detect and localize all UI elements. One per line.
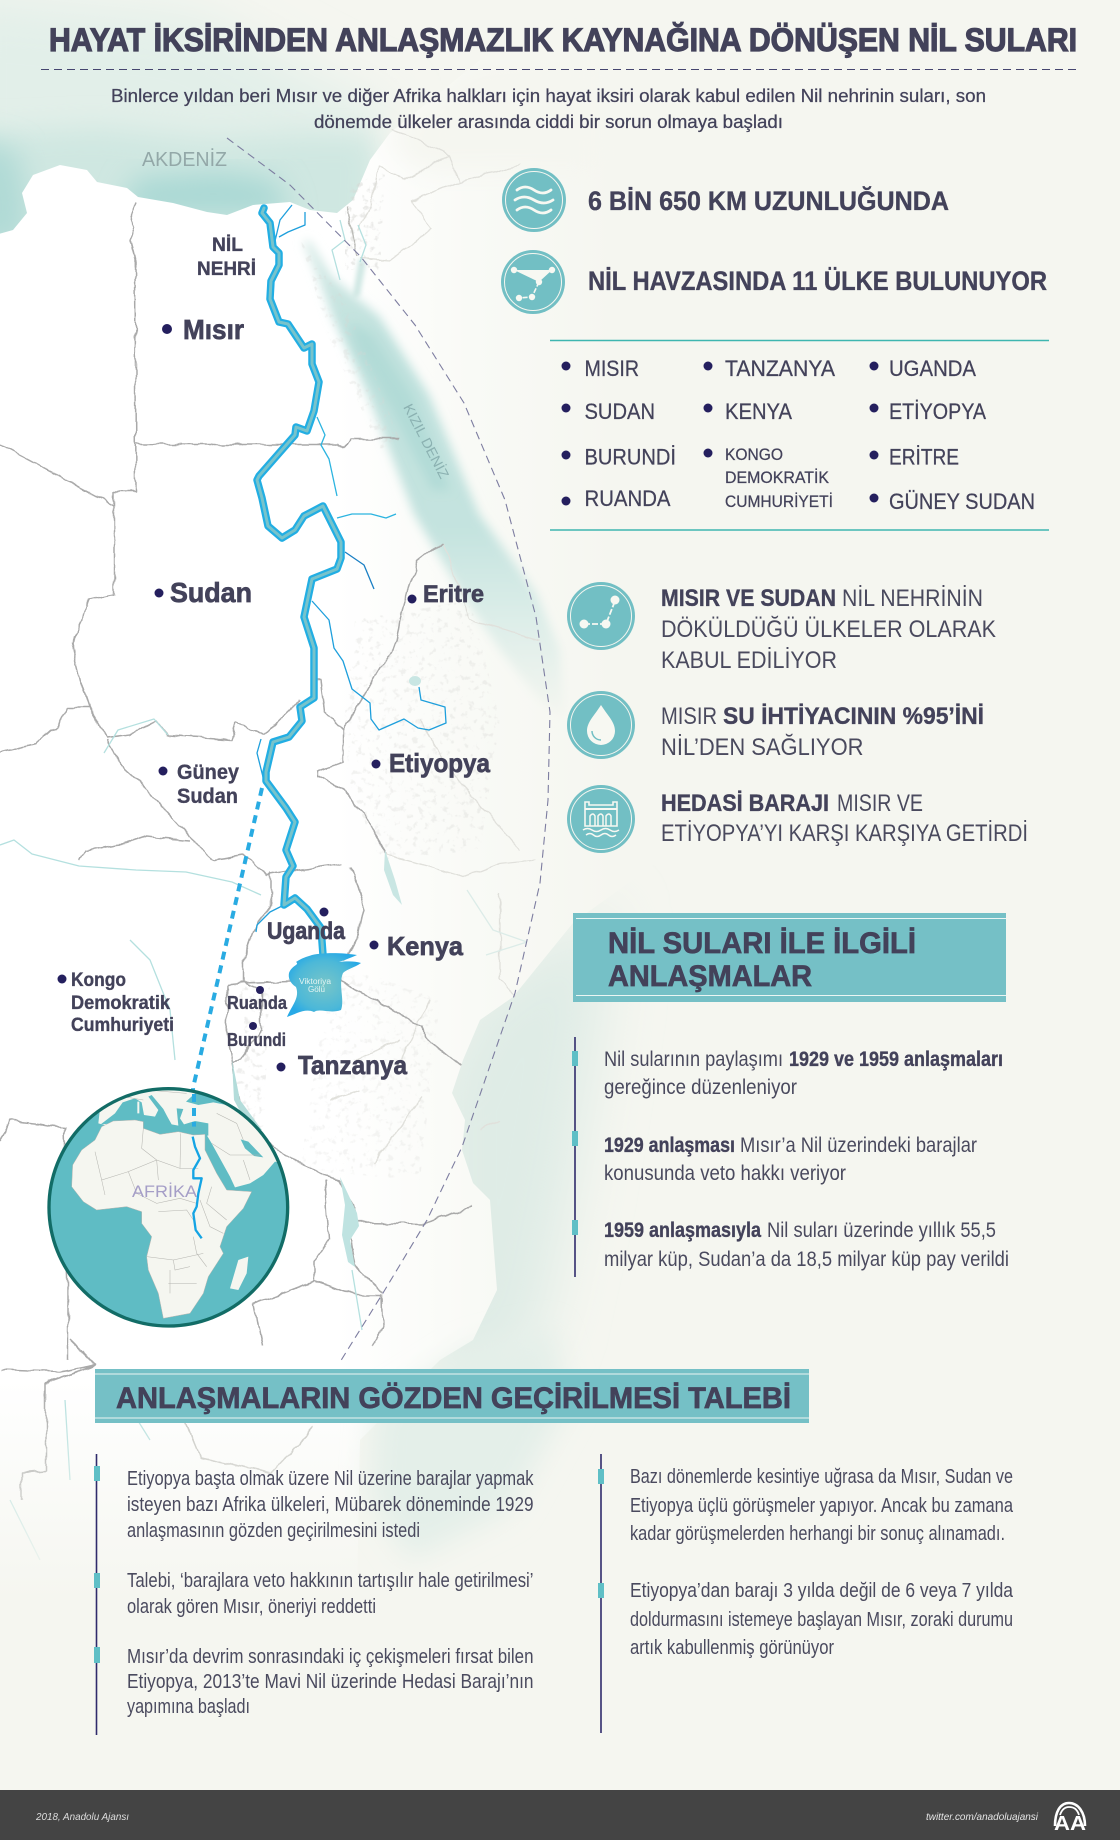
label: Nil Nehri: NEHRİ	[197, 259, 256, 280]
fact: Mısır ve Sudan: KABUL EDİLİYOR	[661, 647, 837, 674]
text: 1959 agreement: milyar küp, Sudan’a da 18,5 milyar küp pay verildi	[604, 1248, 1009, 1271]
intro text	[111, 86, 986, 132]
text: talks	[630, 1466, 1014, 1545]
icon: Anadolu Ajansı logo: AA	[1054, 1813, 1086, 1835]
light borders east	[330, 130, 540, 1163]
footer bar	[0, 1790, 1120, 1840]
label: Kongo Demokratik Cumhuriyeti: Demokratik	[71, 993, 170, 1014]
Nile river main channel	[257, 208, 341, 955]
text: dam construction	[127, 1646, 534, 1718]
text: 1929 and 1959: Nil sularının paylaşımı	[604, 1048, 783, 1071]
text: 1929 and 1959: gereğince düzenleniyor	[604, 1076, 797, 1099]
column: countries 2: KENYA	[725, 399, 792, 424]
fact: Hedasi Barajı: ETİYOPYA’YI KARŞI KARŞIYA GETİRDİ	[661, 820, 1028, 847]
icon: dam	[567, 785, 635, 853]
text: talks: Etiyopya üçlü görüşmeler yapıyor. Ancak bu zamana	[630, 1495, 1014, 1517]
sea: Indian Ocean	[430, 905, 610, 1400]
text: Mısır rejected	[127, 1570, 534, 1618]
text: dam construction: yapımına başladı	[127, 1696, 250, 1718]
label: Mısır: Mısır	[183, 314, 244, 345]
text: 1929 and 1959: 1929 ve 1959 anlaşmaları	[789, 1048, 1003, 1071]
fact: Mısır ve Sudan	[567, 582, 996, 674]
icon: waves	[502, 168, 566, 232]
text: Mısır rejected: olarak gören Mısır, öneriyi reddetti	[127, 1596, 376, 1618]
label: Kızıl Deniz: KIZIL DENİZ	[400, 401, 453, 482]
column: countries 1: RUANDA	[584, 486, 671, 511]
country borders	[0, 202, 473, 1500]
lakes and minor rivers	[0, 220, 527, 1560]
lake Victoria: Viktoriya	[299, 977, 332, 986]
column: countries 2: KONGO	[725, 445, 783, 464]
label: Afrika: AFRİKA	[132, 1182, 198, 1201]
text: 1929 and 1959	[604, 1048, 1003, 1099]
intro text: dönemde ülkeler arasında ciddi bir sorun olmaya başladı	[314, 112, 783, 132]
text: 1929 agreement: 1929 anlaşması	[604, 1134, 735, 1157]
text: filling period: doldurmasını istemeye başlayan Mısır, zoraki durumu	[630, 1609, 1013, 1631]
fact: Hedasi Barajı: MISIR VE	[837, 790, 923, 817]
sea: Mediterranean wash	[0, 0, 385, 270]
stat: basin countries: NİL HAVZASINDA 11 ÜLKE BULUNUYOR	[588, 266, 1047, 296]
title dashed divider	[41, 68, 1078, 70]
fact: su ihtiyacı: MISIR	[661, 703, 717, 730]
label: Güney Sudan: Güney	[177, 761, 239, 784]
column: countries 2: TANZANYA	[725, 356, 835, 381]
lake Victoria	[287, 953, 361, 1017]
text: filling period: artık kabullenmiş görünüyor	[630, 1637, 834, 1659]
icon: water drop	[567, 691, 635, 759]
sea labels	[142, 148, 453, 482]
text: Mısır rejected: Talebi, ‘barajlara veto hakkının tartışılır hale getirilmesi’	[127, 1570, 534, 1592]
icon: nodes	[567, 582, 635, 650]
Nile tributaries	[256, 205, 446, 932]
soft north-east edge of the sea	[385, 50, 600, 170]
stat: basin countries	[501, 250, 1047, 314]
dotted connector from river to globe	[193, 788, 262, 1139]
fact: su ihtiyacı: NİL’DEN SAĞLIYOR	[661, 734, 864, 761]
panel heading: agreements: NİL SULARI İLE İLGİLİ	[608, 927, 916, 960]
label: Kongo Demokratik Cumhuriyeti: Kongo	[71, 970, 126, 991]
intro text: Binlerce yıldan beri Mısır ve diğer Afrika halkları için hayat iksiri olarak kabul edilen Nil nehrinin suları, son	[111, 86, 986, 106]
column: countries 3: GÜNEY SUDAN	[889, 489, 1035, 514]
text: 1959 agreement: Nil suları üzerinde yıllık 55,5	[767, 1219, 996, 1242]
label: Burundi: Burundi	[227, 1030, 286, 1050]
label: Ruanda: Ruanda	[227, 993, 288, 1013]
country labels on map	[58, 314, 490, 1080]
lower cream area	[0, 1600, 1120, 1790]
text: filling period	[630, 1580, 1014, 1659]
text: Etiyopya demand: Etiyopya başta olmak üzere Nil üzerine barajlar yapmak	[127, 1468, 534, 1490]
text: dam construction: Etiyopya, 2013’te Mavi Nil üzerinde Hedasi Barajı’nın	[127, 1671, 534, 1693]
sea: Red Sea	[303, 241, 565, 720]
column: countries 2: CUMHURİYETİ	[725, 492, 833, 511]
label: Nil Nehri: NİL	[212, 235, 243, 256]
text: filling period: Etiyopya’dan barajı 3 yılda değil de 6 veya 7 yılda	[630, 1580, 1014, 1602]
fact: Hedasi Barajı: HEDASİ BARAJI	[661, 790, 829, 817]
column: countries 1	[562, 356, 676, 511]
timeline: left column	[94, 1454, 534, 1735]
timeline: agreements	[572, 1037, 1009, 1277]
fact: su ihtiyacı	[567, 691, 984, 761]
label: Güney Sudan: Sudan	[177, 785, 238, 808]
inset globe: Africa locator	[49, 1080, 297, 1326]
text: talks: Bazı dönemlerde kesintiye uğrasa da Mısır, Sudan ve	[630, 1466, 1013, 1488]
stat: river length	[502, 168, 949, 232]
label: Nil Nehri	[197, 235, 256, 280]
text: Etiyopya demand: isteyen bazı Afrika ülkeleri, Mübarek döneminde 1929	[127, 1494, 534, 1516]
fact: Hedasi Barajı	[567, 785, 1028, 853]
text: 1929 agreement	[604, 1134, 977, 1185]
label: Tanzanya: Tanzanya	[298, 1050, 407, 1080]
column: countries 1: BURUNDİ	[584, 444, 676, 470]
lake Victoria: Gölü	[308, 985, 325, 994]
label: Eritre: Eritre	[423, 581, 484, 608]
column: countries 3	[870, 356, 1035, 514]
label: Güney Sudan	[158, 761, 239, 808]
fact: Mısır ve Sudan: DÖKÜLDÜĞÜ ÜLKELER OLARAK	[661, 616, 996, 643]
fact: su ihtiyacı: SU İHTİYACININ %95’İNİ	[723, 703, 984, 730]
panel heading: agreements	[573, 913, 1006, 1002]
column: countries 2: DEMOKRATİK	[725, 468, 830, 487]
column: countries 3: ERİTRE	[889, 444, 959, 470]
label: Uganda	[267, 908, 346, 945]
social handle: twitter.com/anadoluajansi	[926, 1811, 1039, 1823]
fact: Mısır ve Sudan: MISIR VE SUDAN	[661, 585, 836, 612]
bottom fade of the map	[0, 1380, 1120, 1600]
label: Sudan: Sudan	[170, 577, 252, 608]
panel heading: review demand	[95, 1369, 809, 1423]
title: HAYAT İKSİRİNDEN ANLAŞMAZLIK KAYNAĞINA DÖNÜŞEN NİL SULARI	[49, 22, 1077, 58]
text: Etiyopya demand	[127, 1468, 534, 1542]
stat: river length: 6 BİN 650 KM UZUNLUĞUNDA	[588, 185, 949, 216]
text: 1959 agreement	[604, 1219, 1009, 1271]
column: countries 3: ETİYOPYA	[889, 399, 986, 424]
column: countries 1: SUDAN	[584, 399, 655, 424]
fact: Mısır ve Sudan: NİL NEHRİNİN	[842, 585, 983, 612]
column: countries 1: MISIR	[584, 356, 639, 381]
label: Akdeniz: AKDENİZ	[142, 148, 227, 171]
label: Kenya: Kenya	[387, 931, 464, 961]
icon: network	[501, 250, 565, 314]
label: Uganda: Uganda	[267, 918, 346, 945]
text: 1929 agreement: konusunda veto hakkı veriyor	[604, 1162, 846, 1185]
label: Kongo Demokratik Cumhuriyeti	[58, 970, 174, 1036]
panel: basin country list	[550, 340, 1049, 530]
text: talks: kadar görüşmelerden herhangi bir sonuç alınamadı.	[630, 1523, 1005, 1545]
label: Burundi	[227, 1022, 286, 1050]
icon: Anadolu Ajansı logo	[1054, 1803, 1086, 1835]
panel heading: agreements: ANLAŞMALAR	[608, 960, 812, 993]
label: Ruanda	[227, 986, 288, 1013]
column: countries 2	[704, 356, 835, 511]
terrain texture	[232, 170, 500, 1180]
text: 1959 agreement: 1959 anlaşmasıyla	[604, 1219, 761, 1242]
label: Etiyopya: Etiyopya	[389, 748, 490, 778]
credit: 2018, Anadolu Ajansı	[35, 1811, 129, 1823]
panel heading: review demand: ANLAŞMALARIN GÖZDEN GEÇİRİLMESİ TALEBİ	[116, 1382, 791, 1415]
label: Kongo Demokratik Cumhuriyeti: Cumhuriyeti	[71, 1015, 174, 1036]
text: Etiyopya demand: anlaşmasının gözden geçirilmesini istedi	[127, 1520, 420, 1542]
sea: lower ocean wash	[370, 1330, 570, 1560]
text: dam construction: Mısır’da devrim sonrasındaki iç çekişmeleri fırsat bilen	[127, 1646, 534, 1668]
timeline: right column	[598, 1454, 1014, 1733]
column: countries 3: UGANDA	[889, 356, 976, 381]
text: 1929 agreement: Mısır’a Nil üzerindeki barajlar	[740, 1134, 977, 1157]
arc: dashed map boundary	[227, 138, 550, 1362]
